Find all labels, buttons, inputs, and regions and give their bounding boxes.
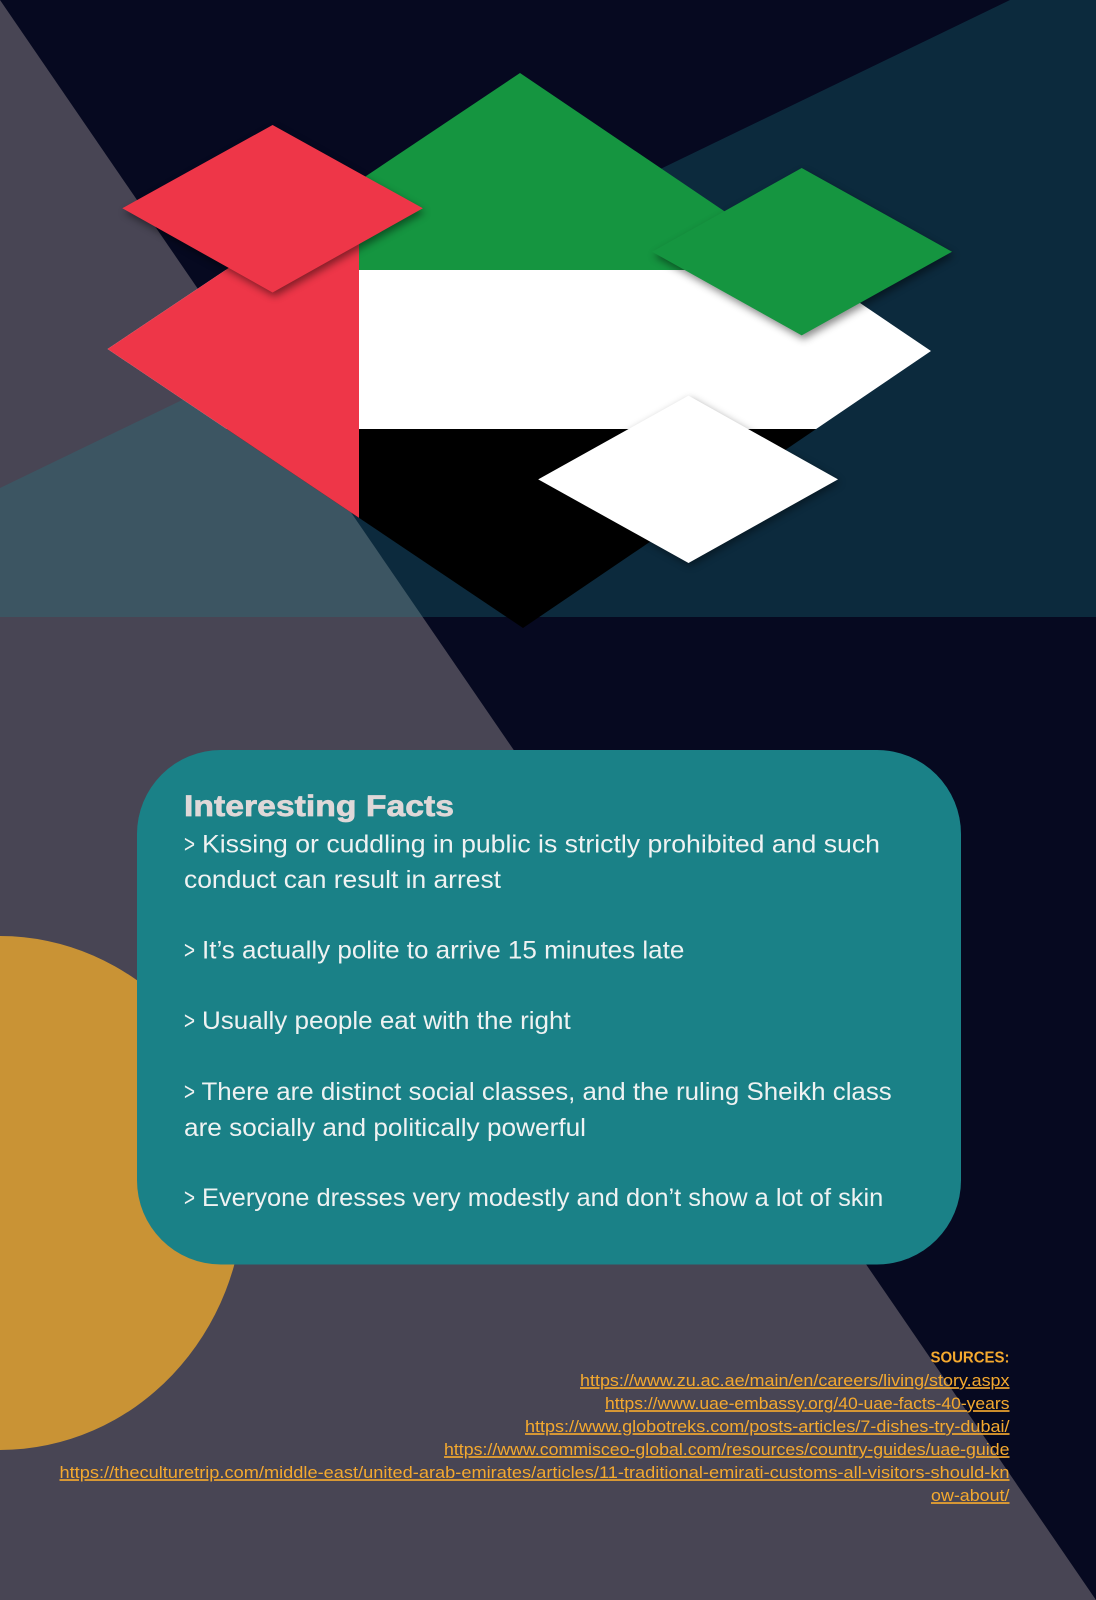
panel: interesting facts xyxy=(137,750,961,1264)
source link 3: https://www.globotreks.com/posts-articles/7-dishes-try-dubai/ xyxy=(525,1418,1010,1436)
green small diamond xyxy=(652,168,952,335)
sources heading: SOURCES: xyxy=(930,1350,1010,1367)
fact 1: Kissing or cuddling in public is strictly prohibited and such xyxy=(202,830,880,858)
fact 1: conduct can result in arrest xyxy=(184,866,501,894)
source link 5 continued: ow-about/ xyxy=(931,1487,1010,1505)
fact 2: It’s actually polite to arrive 15 minutes late xyxy=(202,937,684,965)
fact 4 xyxy=(184,1078,892,1142)
flag of the UAE in a large diamond xyxy=(100,60,940,640)
fact 4: are socially and politically powerful xyxy=(184,1114,586,1142)
source link 2: https://www.uae-embassy.org/40-uae-facts-40-years xyxy=(605,1395,1010,1413)
source link 5: https://theculturetrip.com/middle-east/united-arab-emirates/articles/11-traditional-emirati-customs-all-visitors-should-kn xyxy=(60,1464,1009,1482)
background: translucent teal band xyxy=(0,0,1096,617)
fact 1 xyxy=(184,830,880,894)
white small diamond xyxy=(538,396,838,563)
heading: Interesting Facts xyxy=(184,790,454,823)
fact 1: > xyxy=(184,830,195,858)
fact 5: Everyone dresses very modestly and don’t show a lot of skin xyxy=(202,1184,883,1212)
fact 5: > xyxy=(184,1184,195,1212)
source link 1: https://www.zu.ac.ae/main/en/careers/living/story.aspx xyxy=(580,1372,1010,1390)
fact 3: Usually people eat with the right xyxy=(202,1007,571,1035)
decorative ochre circle xyxy=(0,936,244,1450)
fact 4: There are distinct social classes, and the ruling Sheikh class xyxy=(202,1078,892,1106)
sources list xyxy=(60,1350,1010,1505)
panel background xyxy=(137,750,961,1264)
source link 4: https://www.commisceo-global.com/resources/country-guides/uae-guide xyxy=(444,1441,1010,1459)
fact 2: > xyxy=(184,937,195,965)
fact 3: > xyxy=(184,1007,195,1035)
fact 4: > xyxy=(184,1078,195,1106)
red small diamond xyxy=(122,125,423,292)
